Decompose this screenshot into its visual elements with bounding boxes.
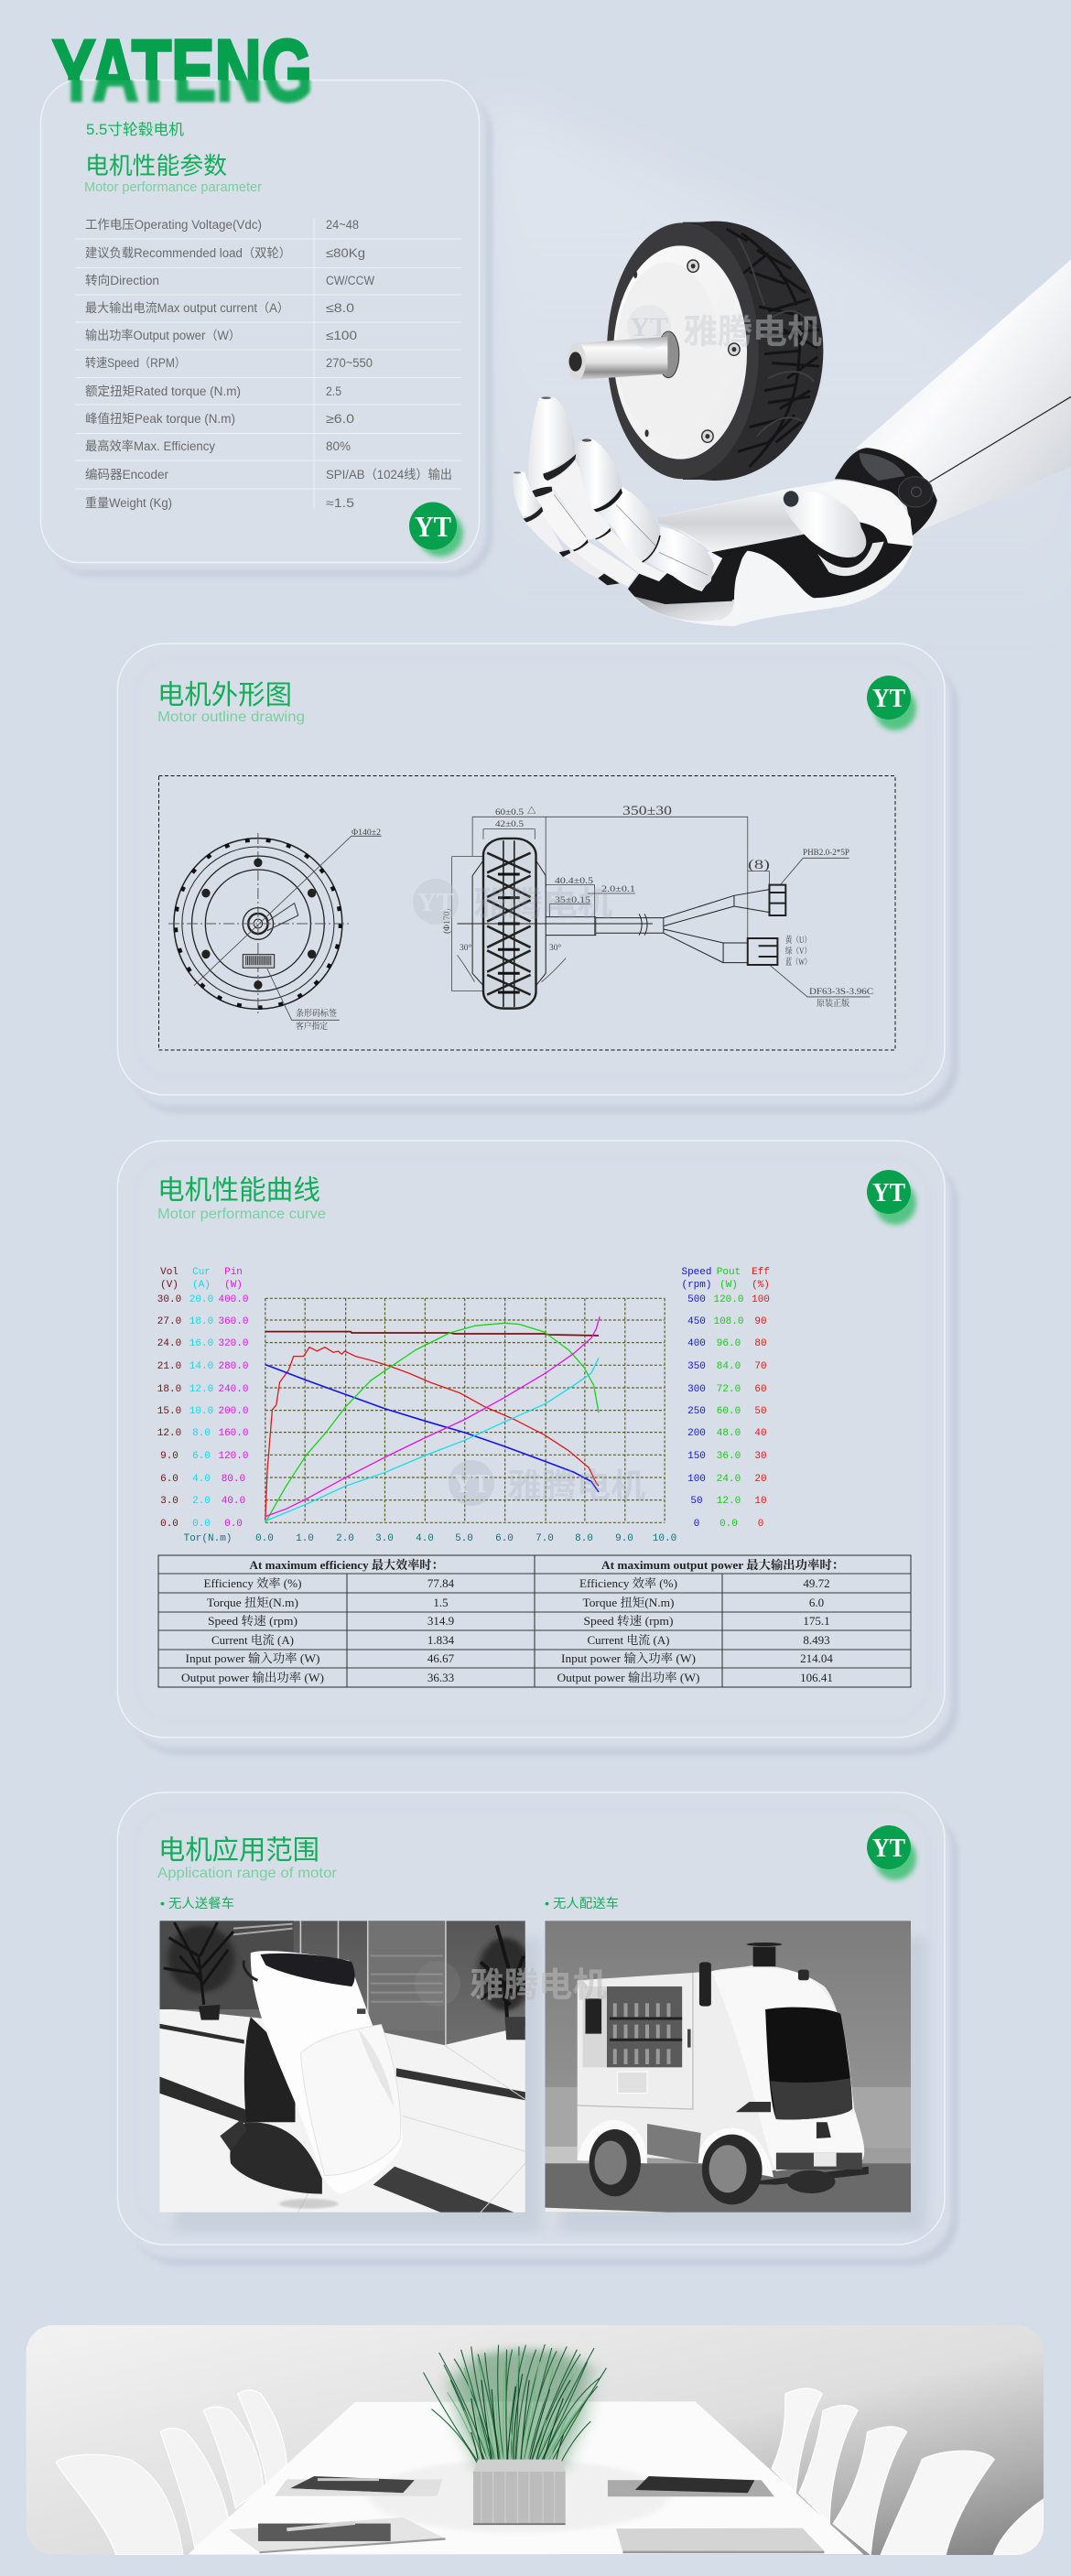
drawing dimension labels: (Φ170): [442, 908, 452, 934]
watermark: [413, 879, 612, 925]
data table: 77.84: [427, 1576, 455, 1590]
chairs right: [772, 2388, 1044, 2555]
input power axis: 320.0: [218, 1338, 249, 1349]
speed axis: 400: [687, 1338, 706, 1349]
panel: application range: [117, 1792, 958, 2266]
watermark: 雅腾电机: [470, 1966, 607, 2004]
voltage axis: 24.0: [157, 1338, 181, 1349]
specification table: SPI/AB（1024线）输出: [326, 468, 452, 482]
specification table: 最高效率Max. Efficiency: [85, 438, 215, 453]
watermark on wheel: YT: [630, 312, 668, 342]
input power axis: 120.0: [218, 1451, 249, 1462]
notebooks: [229, 2476, 824, 2553]
efficiency axis: 20: [754, 1474, 767, 1485]
specification table: 最大输出电流Max output current（A）: [85, 301, 289, 315]
current axis: 2.0: [192, 1496, 211, 1507]
data table: 36.33: [427, 1671, 454, 1684]
speed axis: Speed: [681, 1267, 712, 1278]
current axis: [189, 1267, 213, 1530]
efficiency axis: 80: [754, 1338, 767, 1349]
drawing dimension labels: (8): [748, 858, 770, 872]
brand logo: [51, 38, 313, 105]
data table: Torque 扭矩(N.m): [207, 1596, 298, 1609]
watermark: [415, 1961, 607, 2007]
hub motor wheel: [568, 222, 823, 481]
input power axis: (W): [224, 1280, 243, 1291]
specification table: 工作电压Operating Voltage(Vdc): [85, 218, 262, 232]
chairs left: [56, 2390, 287, 2555]
subheading: Application range of motor: [157, 1866, 338, 1881]
watermark on wheel: 雅腾电机: [683, 313, 822, 351]
output power axis: 120.0: [713, 1294, 744, 1305]
voltage axis: 27.0: [157, 1316, 181, 1327]
data table: Torque 扭矩(N.m): [582, 1596, 674, 1609]
output power axis: 0.0: [719, 1519, 738, 1530]
drawing dimension labels: 蓝（W）: [785, 957, 811, 968]
torque axis: 9.0: [615, 1533, 633, 1544]
specification table: 额定扭矩Rated torque (N.m): [85, 384, 241, 398]
torque axis: 6.0: [495, 1533, 514, 1544]
icon: YT badge: YT: [872, 684, 905, 713]
speed axis: 100: [687, 1474, 706, 1485]
data table: 1.5: [433, 1596, 449, 1609]
efficiency axis: 50: [754, 1406, 767, 1417]
current axis: 0.0: [192, 1519, 211, 1530]
drawing dimension labels: 60±0.5: [495, 808, 524, 817]
icon: YT badge: YT: [872, 1834, 905, 1863]
data table: At maximum output power 最大输出功率时：: [601, 1558, 844, 1572]
data table: [158, 1555, 911, 1687]
drawing dimension labels: 35±0.15: [555, 896, 590, 905]
speed axis: 0: [694, 1519, 699, 1530]
data table: 214.04: [800, 1651, 833, 1665]
specification table: 编码器Encoder: [85, 468, 169, 482]
photo: meeting table with plant: [26, 2325, 1044, 2555]
plant: [424, 2344, 606, 2472]
drawing dimension labels: 条形码标签: [296, 1008, 337, 1019]
current axis: 6.0: [192, 1451, 211, 1462]
input power axis: Pin: [224, 1267, 243, 1278]
specification table: CW/CCW: [326, 274, 374, 287]
current axis: Cur: [192, 1267, 211, 1278]
subheading: Motor performance curve: [157, 1207, 326, 1222]
speed axis: 450: [687, 1316, 706, 1327]
specification table: ≤80Kg: [326, 246, 365, 260]
dashed drawing frame: [159, 776, 895, 1050]
voltage axis: 6.0: [160, 1474, 178, 1485]
current axis: 18.0: [189, 1316, 213, 1327]
output power axis: 12.0: [717, 1496, 741, 1507]
product name: 5.5寸轮毂电机: [86, 121, 185, 138]
input power axis: 360.0: [218, 1316, 249, 1327]
data table: Output power 输出功率 (W): [181, 1671, 324, 1684]
data table: Input power 输入功率 (W): [561, 1651, 696, 1665]
data table: 49.72: [803, 1576, 830, 1590]
efficiency axis: 70: [754, 1361, 767, 1372]
efficiency axis: 40: [754, 1428, 767, 1439]
output power axis: 24.0: [717, 1474, 741, 1485]
robot arm: [835, 259, 1071, 536]
table: [188, 2401, 864, 2555]
heading: 电机应用范围: [158, 1835, 319, 1866]
voltage axis: 30.0: [157, 1294, 181, 1305]
photo: delivery vehicle: [545, 1921, 911, 2213]
robot hand holding hub motor wheel: [513, 222, 1071, 626]
speed axis: 200: [687, 1428, 706, 1439]
side view of motor and cable: [452, 817, 870, 1009]
speed axis: 50: [690, 1496, 703, 1507]
current axis: 20.0: [189, 1294, 213, 1305]
torque axis: 4.0: [416, 1533, 434, 1544]
torque axis: 8.0: [575, 1533, 593, 1544]
torque axis: Tor(N.m): [184, 1533, 232, 1544]
torque axis: 2.0: [336, 1533, 354, 1544]
photo shadow right: [560, 1937, 926, 2232]
voltage axis: [157, 1267, 181, 1530]
input power axis: [218, 1267, 249, 1530]
brand logo: YATENG: [55, 22, 313, 120]
voltage axis: Vol: [160, 1267, 178, 1278]
current axis: 14.0: [189, 1361, 213, 1372]
input power axis: 160.0: [218, 1428, 249, 1439]
data table: Speed 转速 (rpm): [584, 1614, 674, 1628]
watermark on wheel: [627, 305, 822, 351]
input power axis: 40.0: [222, 1496, 245, 1507]
output power axis: Pout: [717, 1267, 741, 1278]
robot fingers: [513, 396, 744, 604]
voltage axis: 12.0: [157, 1428, 181, 1439]
panel: motor performance parameters: [40, 22, 492, 577]
output power axis: 84.0: [717, 1361, 741, 1372]
icon: YT badge: YT: [415, 510, 451, 543]
drawing dimension labels: [296, 804, 873, 1032]
data table: At maximum efficiency 最大效率时：: [249, 1558, 443, 1572]
efficiency axis: 10: [754, 1496, 767, 1507]
robot palm and thumb: [628, 481, 914, 626]
current axis: (A): [192, 1280, 211, 1291]
watermark: 雅腾电机: [507, 1467, 645, 1505]
speed axis: 300: [687, 1384, 706, 1395]
input power axis: 200.0: [218, 1406, 249, 1417]
specification table: 转速Speed（RPM）: [85, 356, 186, 370]
drawing dimension labels: 42±0.5: [495, 820, 524, 829]
data table: Input power 输入功率 (W): [185, 1651, 320, 1665]
current axis: 10.0: [189, 1406, 213, 1417]
data table: 6.0: [809, 1596, 824, 1609]
voltage axis: (V): [160, 1280, 178, 1291]
specification table: 2.5: [326, 384, 341, 398]
chart grid: [265, 1298, 665, 1522]
voltage axis: 0.0: [160, 1519, 178, 1530]
efficiency axis: (%): [752, 1280, 770, 1291]
panel: motor performance curve: [117, 1141, 958, 1755]
efficiency axis: 60: [754, 1384, 767, 1395]
output power axis: 96.0: [717, 1338, 741, 1349]
photo: meal delivery robot: [159, 1921, 532, 2213]
subheading: Motor outline drawing: [157, 709, 305, 725]
drawing dimension labels: 黄（U）: [785, 935, 811, 946]
specification table: 建议负载Recommended load（双轮）: [85, 246, 291, 260]
data table: 314.9: [427, 1614, 454, 1628]
output power axis: 48.0: [717, 1428, 741, 1439]
drawing dimension labels: 30°: [460, 943, 472, 953]
data table: 46.67: [427, 1651, 455, 1665]
specification table: 80%: [326, 439, 351, 453]
data table: Efficiency 效率 (%): [203, 1576, 302, 1590]
data table: 175.1: [803, 1614, 830, 1628]
application label left: • 无人送餐车: [160, 1896, 234, 1910]
voltage axis: 21.0: [157, 1361, 181, 1372]
icon: YT badge: [409, 502, 463, 557]
photo shadow left: [175, 1937, 541, 2232]
watermark: YT: [417, 888, 454, 917]
speed axis: (rpm): [681, 1280, 712, 1291]
brand logo: YATENG: [52, 22, 312, 120]
output power axis: 108.0: [713, 1316, 744, 1327]
data table: Current 电流 (A): [211, 1633, 294, 1647]
input power axis: 0.0: [224, 1519, 243, 1530]
drawing dimension labels: DF63-3S-3.96C: [809, 988, 873, 997]
efficiency axis: [752, 1267, 770, 1530]
drawing dimension labels: 30°: [549, 943, 562, 953]
input power axis: 400.0: [218, 1294, 249, 1305]
efficiency axis: 0: [758, 1519, 763, 1530]
speed axis: 500: [687, 1294, 706, 1305]
drawing dimension labels: 350±30: [622, 804, 672, 818]
icon: YT badge: YT: [872, 1178, 905, 1207]
voltage axis: 3.0: [160, 1496, 178, 1507]
current axis: 8.0: [192, 1428, 211, 1439]
data table: 8.493: [803, 1633, 830, 1647]
voltage axis: 18.0: [157, 1384, 181, 1395]
output power axis: 72.0: [717, 1384, 741, 1395]
watermark: 雅腾电机: [473, 885, 612, 923]
background sheen: [485, 101, 1071, 632]
drawing dimension labels: 客户指定: [296, 1021, 328, 1032]
input power axis: 240.0: [218, 1384, 249, 1395]
specification table: 转向Direction: [85, 274, 159, 287]
output power axis: (W): [719, 1280, 738, 1291]
specification table: ≈1.5: [326, 496, 354, 510]
torque axis: 10.0: [653, 1533, 676, 1544]
specification table: 峰值扭矩Peak torque (N.m): [85, 412, 235, 426]
data table: Current 电流 (A): [588, 1633, 670, 1647]
chart curves: [265, 1316, 600, 1522]
heading: 电机性能参数: [85, 152, 227, 179]
speed axis: [681, 1267, 712, 1530]
input power axis: 280.0: [218, 1361, 249, 1372]
subheading: Motor performance parameter: [84, 179, 262, 195]
data table: Speed 转速 (rpm): [208, 1614, 298, 1628]
watermark: [449, 1460, 645, 1506]
specification table: 输出功率Output power（W）: [85, 328, 241, 342]
torque axis: 3.0: [375, 1533, 394, 1544]
output power axis: 36.0: [717, 1451, 741, 1462]
speed axis: 250: [687, 1406, 706, 1417]
performance chart: [157, 1267, 770, 1544]
output power axis: [713, 1267, 744, 1530]
heading: 电机性能曲线: [157, 1175, 320, 1206]
current axis: 4.0: [192, 1474, 211, 1485]
voltage axis: 9.0: [160, 1451, 178, 1462]
data table: 106.41: [800, 1671, 833, 1684]
torque axis: 0.0: [255, 1533, 274, 1544]
data table: Output power 输出功率 (W): [557, 1671, 699, 1684]
icon: YT badge: [867, 1170, 916, 1225]
panel: motor outline drawing: [117, 644, 958, 1113]
voltage axis: 15.0: [157, 1406, 181, 1417]
speed axis: 350: [687, 1361, 706, 1372]
torque axis: [184, 1533, 676, 1544]
specification table: ≤100: [326, 329, 357, 342]
data table: 1.834: [427, 1633, 455, 1647]
torque axis: 7.0: [536, 1533, 554, 1544]
current axis: 16.0: [189, 1338, 213, 1349]
specification table: ≥6.0: [326, 412, 354, 426]
icon: YT badge: [867, 1825, 916, 1880]
icon: YT badge: [867, 676, 916, 731]
efficiency axis: 30: [754, 1451, 767, 1462]
drawing dimension labels: 2.0±0.1: [601, 885, 635, 894]
output power axis: 60.0: [717, 1406, 741, 1417]
specification table: ≤8.0: [326, 301, 354, 315]
front view of motor: [168, 833, 382, 1020]
torque axis: 5.0: [455, 1533, 473, 1544]
application label right: • 无人配送车: [545, 1896, 619, 1910]
heading: 电机外形图: [157, 680, 292, 710]
specification table: 270~550: [326, 356, 373, 370]
concrete pot: [473, 2460, 566, 2524]
efficiency axis: 90: [754, 1316, 767, 1327]
watermark: YT: [453, 1469, 490, 1499]
torque axis: 1.0: [296, 1533, 314, 1544]
specification table: 24~48: [326, 218, 359, 232]
drawing dimension labels: △: [527, 806, 536, 817]
data table: Efficiency 效率 (%): [579, 1576, 677, 1590]
specification table: 重量Weight (Kg): [85, 496, 172, 510]
input power axis: 80.0: [222, 1474, 245, 1485]
current axis: 12.0: [189, 1384, 213, 1395]
efficiency axis: 100: [752, 1294, 770, 1305]
drawing dimension labels: 原装正版: [817, 998, 849, 1009]
speed axis: 150: [687, 1451, 706, 1462]
drawing dimension labels: PHB2.0-2*5P: [803, 849, 849, 858]
efficiency axis: Eff: [752, 1267, 770, 1278]
drawing dimension labels: 40.4±0.5: [555, 877, 593, 886]
drawing dimension labels: 绿（V）: [785, 947, 811, 957]
drawing dimension labels: Φ140±2: [352, 828, 381, 838]
specification table: [75, 218, 461, 510]
